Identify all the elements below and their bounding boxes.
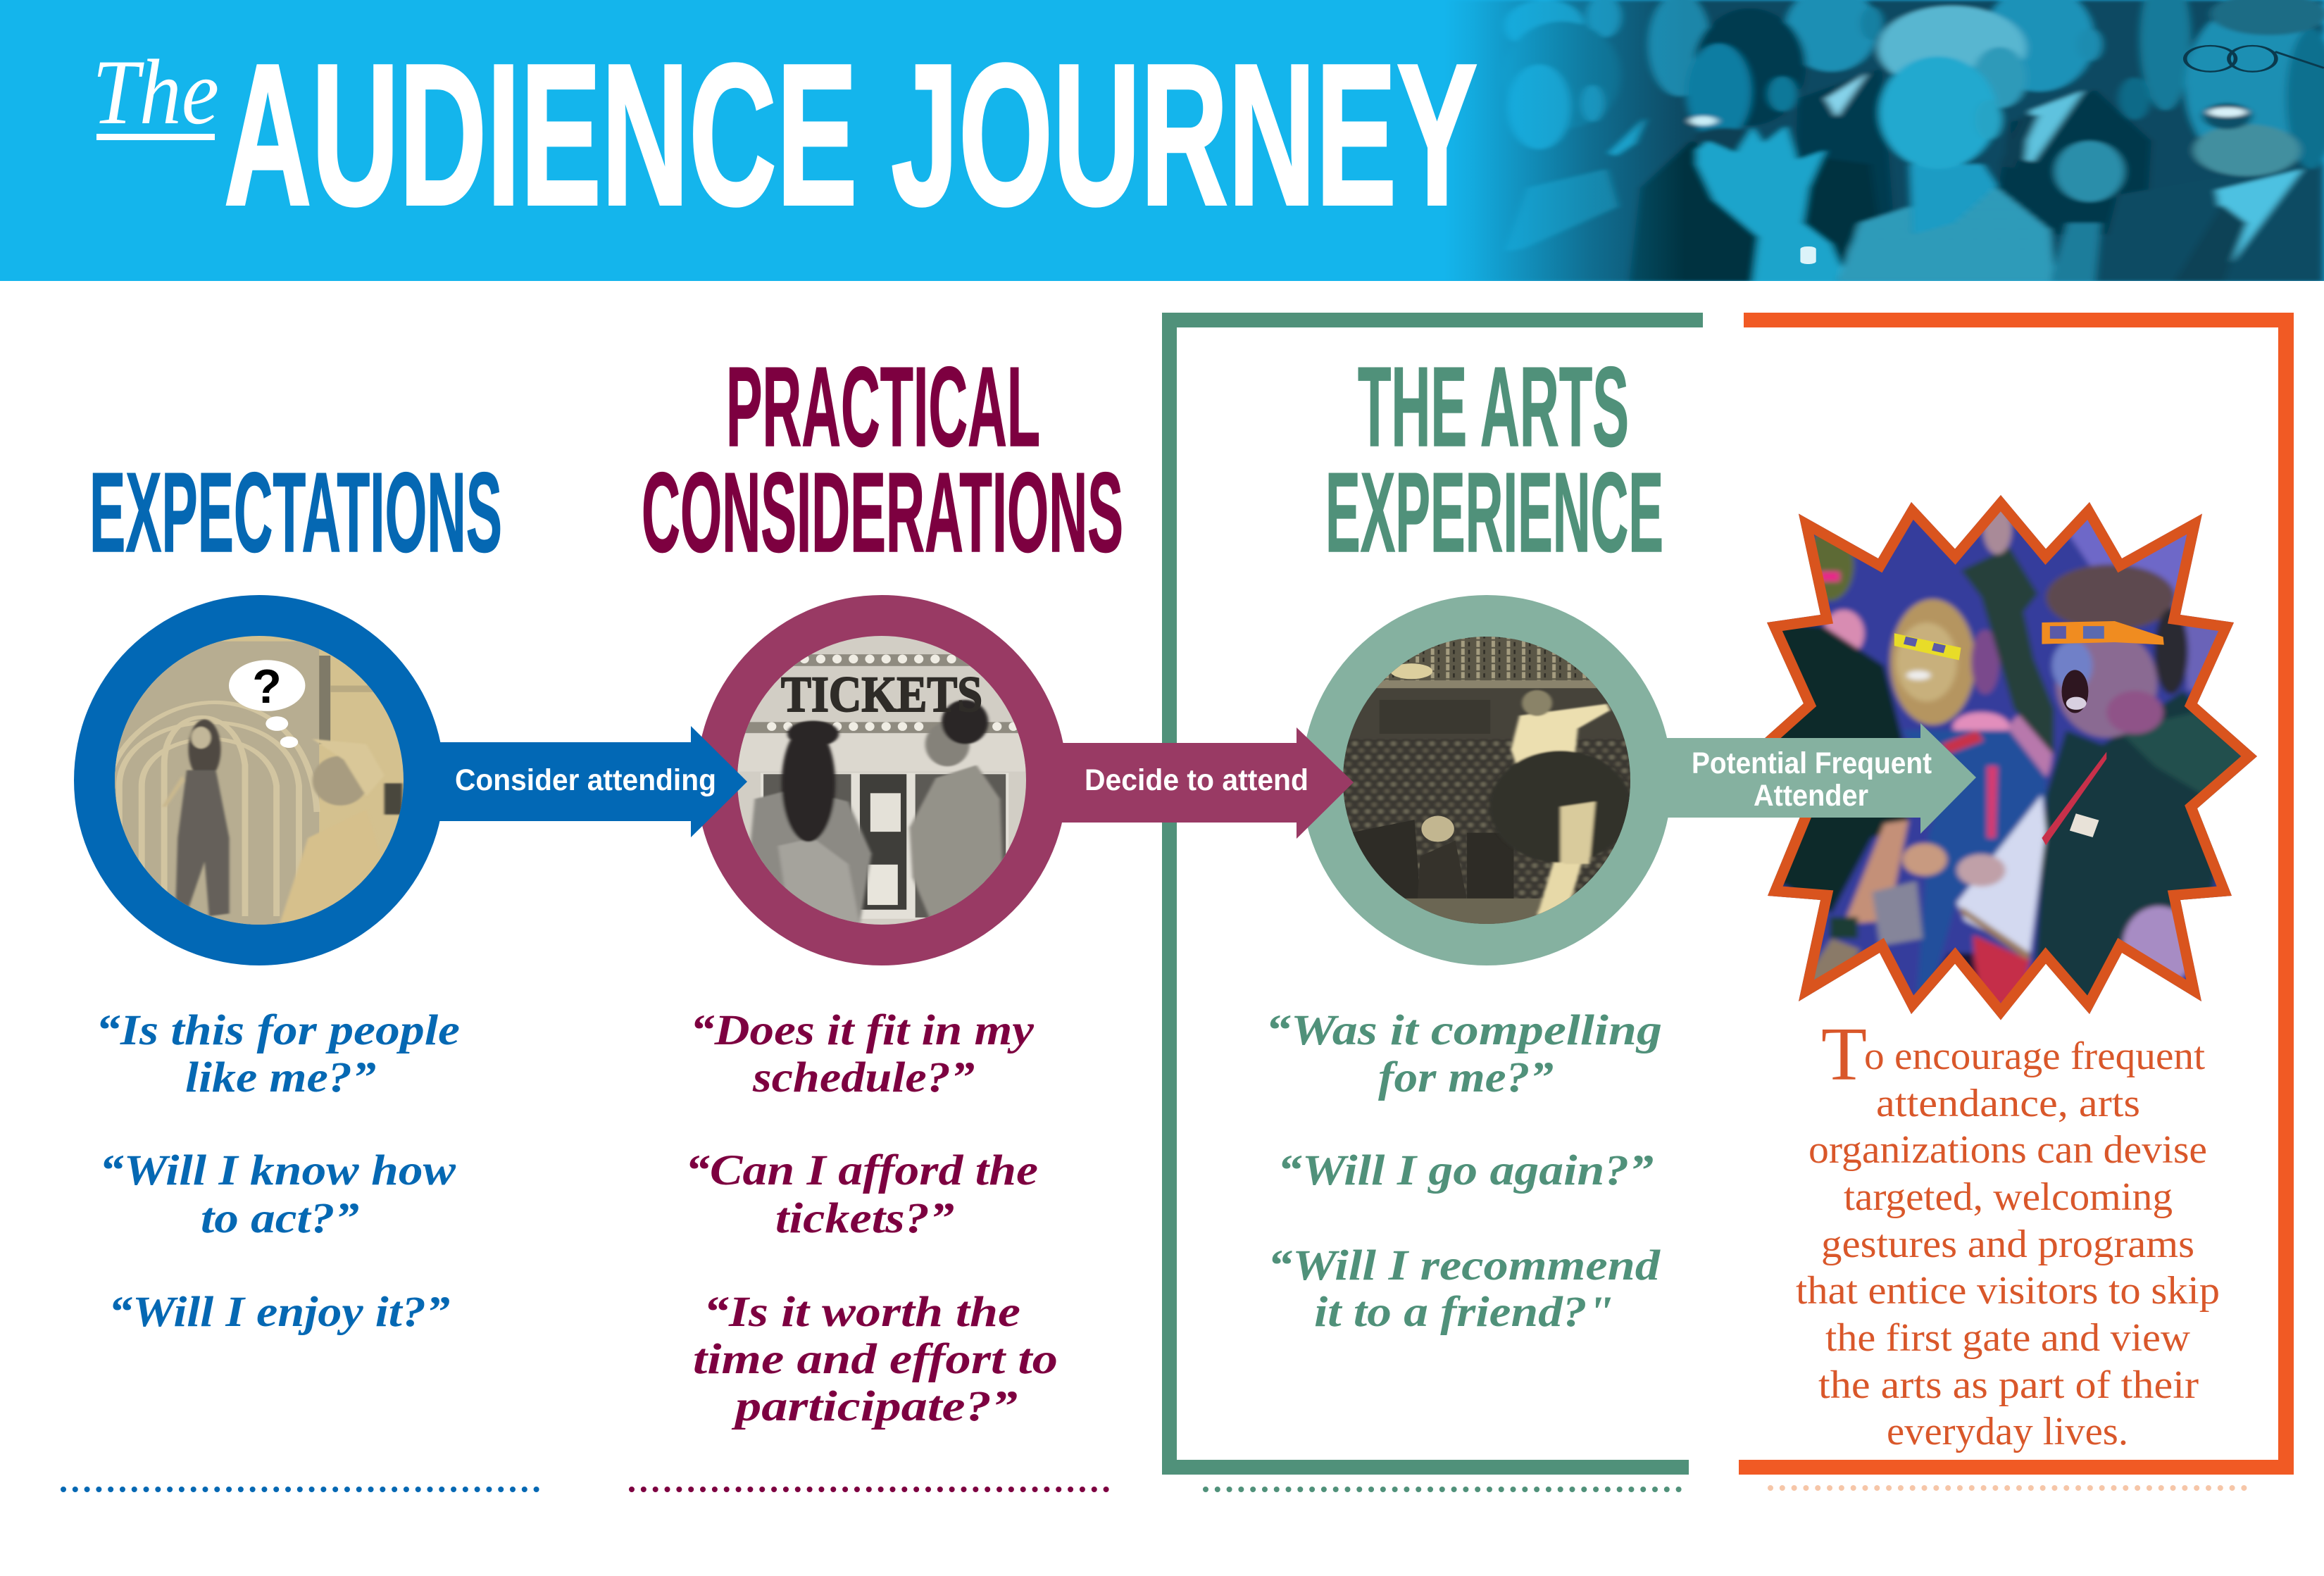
dotted rule: arts experience bbox=[1206, 1487, 1680, 1492]
ticket booth sign: TICKETS bbox=[781, 666, 982, 723]
circle: expectations bbox=[74, 595, 444, 965]
heading: the arts experience bbox=[1325, 344, 1663, 576]
header banner bbox=[0, 0, 2324, 282]
panel frame: frequent attender bbox=[1739, 313, 2294, 1475]
dotted rule: practical considerations bbox=[632, 1487, 1107, 1492]
quotes: expectations: like me?” bbox=[185, 1054, 376, 1101]
quotes: arts experience bbox=[1266, 1007, 1662, 1336]
text: EXPECTATIONS bbox=[89, 449, 502, 576]
quotes: practical considerations: schedule?” bbox=[752, 1054, 975, 1101]
quotes: arts experience: “Was it compelling bbox=[1266, 1007, 1662, 1054]
quotes: arts experience: “Will I recommend bbox=[1268, 1242, 1661, 1289]
thought bubble with question mark bbox=[229, 660, 305, 748]
arrow: consider attending bbox=[423, 726, 747, 837]
dotted rule: expectations bbox=[63, 1487, 537, 1492]
header photo: applauding audience bbox=[1444, 0, 2324, 282]
text block: encourage frequent attendance: o encourage frequent bbox=[1864, 1034, 2205, 1078]
quotes: practical considerations: “Can I afford the bbox=[685, 1147, 1038, 1194]
text block: encourage frequent attendance: targeted, welcoming bbox=[1844, 1175, 2173, 1219]
text: CONSIDERATIONS bbox=[642, 449, 1123, 576]
quotes: practical considerations: “Is it worth the bbox=[704, 1289, 1020, 1336]
heading: practical considerations: PRACTICAL bbox=[726, 344, 1040, 470]
quotes: arts experience: for me?” bbox=[1378, 1054, 1554, 1101]
open mouth bbox=[2062, 670, 2088, 713]
circle: practical considerations bbox=[696, 595, 1067, 965]
text block: encourage frequent attendance: everyday lives. bbox=[1887, 1410, 2128, 1453]
dotted rule: frequent attender bbox=[1770, 1485, 2245, 1491]
heading: practical considerations bbox=[642, 344, 1123, 576]
arrow: decide to attend bbox=[1042, 727, 1354, 839]
text block: encourage frequent attendance: attendance, arts bbox=[1876, 1082, 2140, 1125]
thought bubble with question mark: ? bbox=[252, 660, 282, 713]
glasses bbox=[2185, 46, 2324, 72]
text block: encourage frequent attendance bbox=[1796, 1013, 2220, 1453]
quotes: practical considerations: “Does it fit in my bbox=[690, 1007, 1035, 1054]
wristwatch bbox=[1800, 246, 1816, 264]
lanyard bbox=[2042, 752, 2106, 845]
photo: dancer and applauding crowd bbox=[1343, 637, 1630, 924]
photo: visitors at art installation bbox=[115, 636, 404, 925]
quotes: expectations bbox=[96, 1007, 460, 1336]
quotes: arts experience: it to a friend?" bbox=[1314, 1289, 1614, 1336]
text block: encourage frequent attendance: gestures and programs bbox=[1821, 1222, 2194, 1266]
panel frame: the arts experience bbox=[1162, 313, 1703, 1475]
text block: encourage frequent attendance: organizations can devise bbox=[1808, 1128, 2207, 1172]
title underline bbox=[96, 134, 215, 140]
quotes: expectations: “Will I enjoy it?” bbox=[108, 1289, 450, 1336]
quotes: arts experience: “Will I go again?” bbox=[1277, 1147, 1654, 1194]
circle: arts experience bbox=[1301, 595, 1672, 965]
name badge bbox=[2070, 813, 2099, 837]
arrow: decide to attend: Decide to attend bbox=[1085, 763, 1308, 797]
arrow: potential frequent attender bbox=[1648, 723, 1976, 834]
quotes: expectations: to act?” bbox=[201, 1195, 359, 1242]
text block: encourage frequent attendance: the arts as part of their bbox=[1818, 1363, 2199, 1407]
text block: encourage frequent attendance: that entice visitors to skip bbox=[1796, 1269, 2220, 1313]
photo: two women at ticket booth bbox=[737, 636, 1026, 925]
title bbox=[92, 22, 1478, 247]
orange 3D glasses bbox=[2042, 621, 2164, 645]
quotes: practical considerations: time and effort to bbox=[693, 1336, 1058, 1383]
arrow: potential frequent attender: Attender bbox=[1754, 779, 1868, 813]
text: EXPERIENCE bbox=[1325, 449, 1663, 576]
drop cap: T bbox=[1821, 1013, 1867, 1096]
quotes: expectations: “Will I know how bbox=[99, 1147, 456, 1194]
quotes: expectations: “Is this for people bbox=[96, 1007, 460, 1054]
starburst orange outline bbox=[1744, 495, 2257, 1020]
title word: The: The bbox=[92, 40, 219, 144]
yellow 3D glasses bbox=[1894, 633, 1961, 661]
starburst photo: excited attender in 3D glasses bbox=[1765, 495, 2257, 1020]
arrow: potential frequent attender: Potential Frequent bbox=[1692, 746, 1932, 780]
heading: the arts experience: THE ARTS bbox=[1358, 344, 1629, 470]
quotes: practical considerations bbox=[685, 1007, 1058, 1430]
quotes: practical considerations: tickets?” bbox=[775, 1195, 954, 1242]
arrow: consider attending: Consider attending bbox=[455, 763, 716, 797]
quotes: practical considerations: participate?” bbox=[731, 1383, 1018, 1430]
text block: encourage frequent attendance: the first gate and view bbox=[1825, 1316, 2191, 1360]
title words: Audience Journey: AUDIENCE JOURNEY bbox=[224, 22, 1478, 247]
